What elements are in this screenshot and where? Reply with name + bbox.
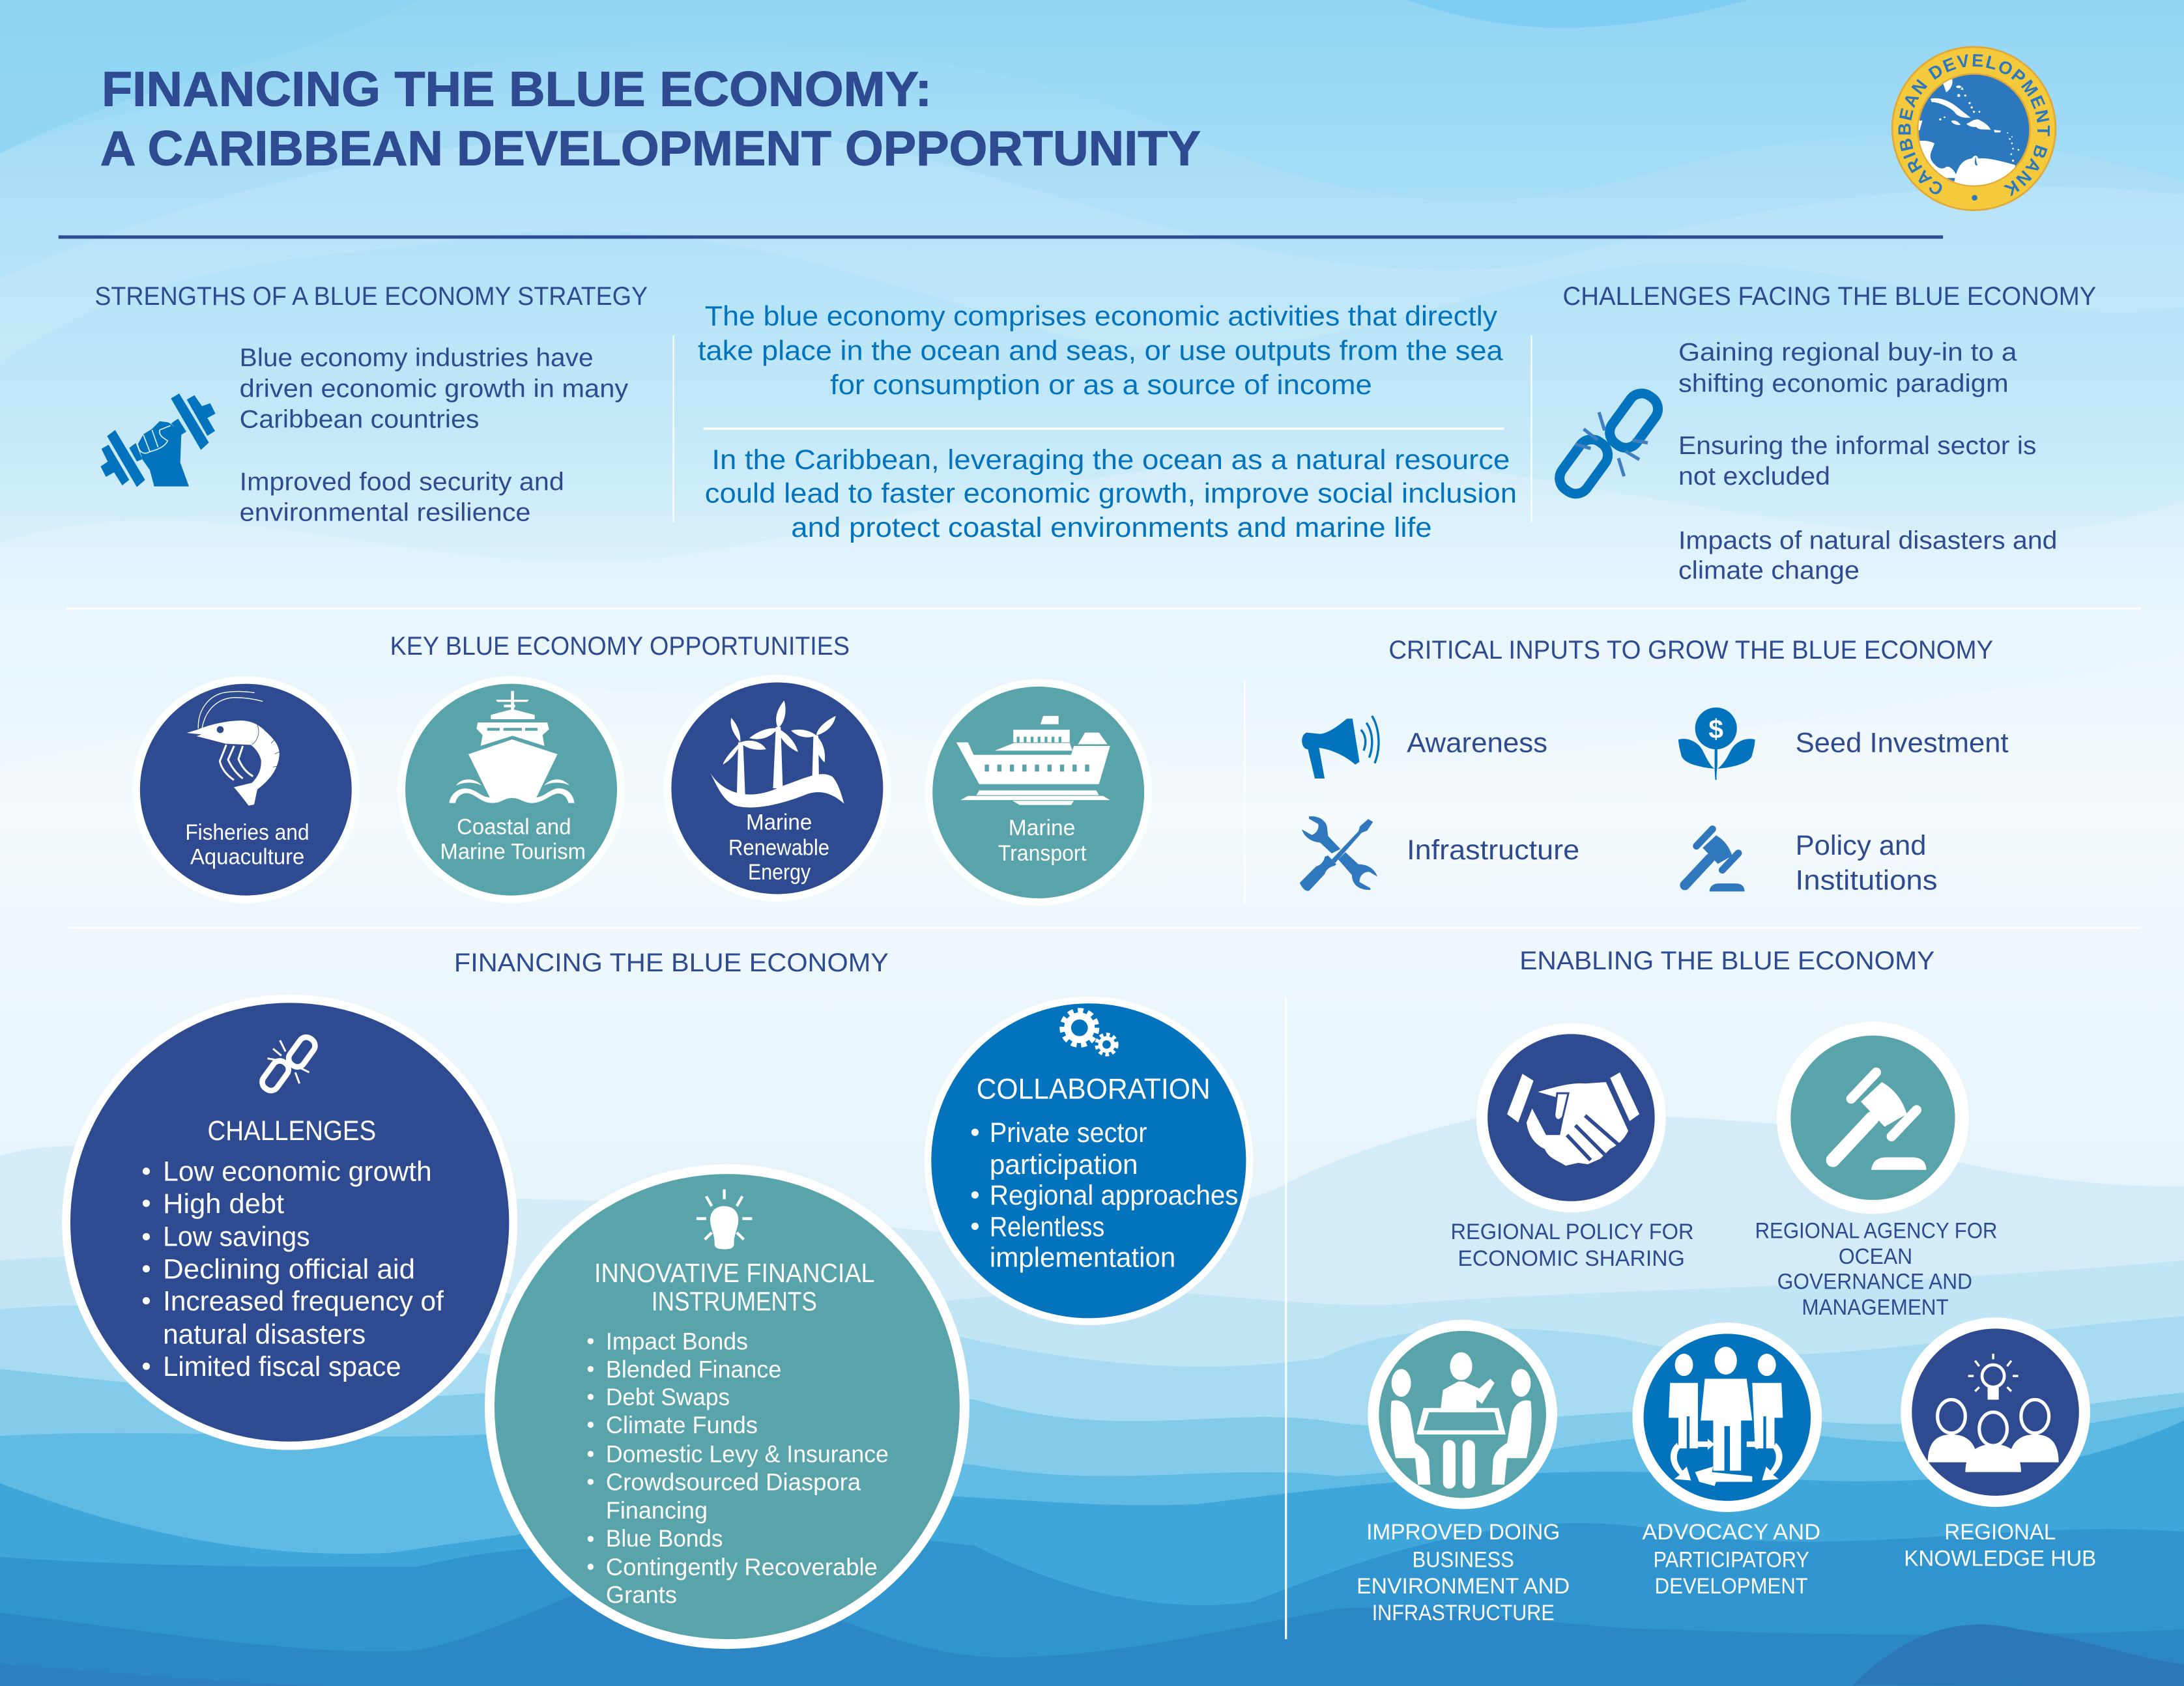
heading: financing: FINANCING THE BLUE ECONOMY xyxy=(454,949,889,977)
logo: Caribbean Development Bank seal: CARIBBEAN DEVELOPMENT BANK xyxy=(1899,54,2050,197)
panel: challenges circle xyxy=(62,995,517,1450)
text: strengths list: Blue economy industries have xyxy=(240,344,594,372)
text: challenges list: Ensuring the informal sector is xyxy=(1678,432,2036,460)
icon: gavel small xyxy=(1685,829,1745,891)
header rule xyxy=(59,235,1943,238)
bullets: instruments list: Blended Finance xyxy=(606,1355,781,1382)
text: strengths list xyxy=(240,344,629,527)
bullets: challenges list: Increased frequency of xyxy=(163,1286,444,1317)
text: challenges list: Impacts of natural disasters and xyxy=(1678,526,2057,554)
text: challenges list: climate change xyxy=(1678,557,1860,585)
bullets: collaboration list: implementation xyxy=(990,1242,1175,1274)
label: fisheries: Fisheries and xyxy=(185,820,309,845)
icon: wind turbines xyxy=(710,700,844,807)
heading: critical inputs: CRITICAL INPUTS TO GROW THE BLUE ECONOMY xyxy=(1388,636,1993,664)
label: regional agency: MANAGEMENT xyxy=(1802,1295,1949,1320)
circle: improved doing business xyxy=(1357,1320,1570,1625)
bullets: instruments list xyxy=(588,1328,889,1608)
bullets: challenges list: Declining official aid xyxy=(163,1253,415,1285)
icon: light bulb xyxy=(697,1190,752,1250)
label: renewable: Renewable xyxy=(728,836,829,861)
heading: challenges: CHALLENGES xyxy=(208,1115,376,1147)
label: improved doing business: BUSINESS xyxy=(1413,1548,1514,1573)
icon: meeting at table xyxy=(1390,1352,1532,1489)
label: improved doing business: IMPROVED DOING xyxy=(1366,1520,1560,1545)
title: FINANCING THE BLUE ECONOMY: xyxy=(102,61,932,116)
label: renewable: Marine xyxy=(746,810,812,835)
bullets: instruments list: Domestic Levy & Insurance xyxy=(606,1440,889,1468)
text: strengths list: Improved food security and xyxy=(240,468,564,496)
icon: broken chain xyxy=(1554,388,1663,499)
panel: challenges facing the blue economy xyxy=(1554,282,2096,585)
panel: blue economy definition: In the Caribbean, leveraging the ocean as a natural resource xyxy=(711,444,1510,476)
heading: key opportunities: KEY BLUE ECONOMY OPPORTUNITIES xyxy=(390,632,850,661)
bullets: instruments list: Impact Bonds xyxy=(606,1328,748,1355)
label: renewable xyxy=(728,810,829,885)
heading: enabling: ENABLING THE BLUE ECONOMY xyxy=(1519,947,1934,975)
label: policy and institutions xyxy=(1796,830,1938,896)
panel: strengths of a blue economy strategy xyxy=(94,282,648,527)
label: regional agency xyxy=(1755,1218,1998,1320)
icon: seed investment xyxy=(1678,707,1755,780)
bullets: instruments list: Contingently Recoverable xyxy=(606,1553,878,1580)
bullets: challenges list xyxy=(143,1156,444,1382)
circle: marine renewable energy xyxy=(664,675,891,902)
icon: handshake xyxy=(1507,1072,1639,1165)
bullets: instruments list: Crowdsourced Diaspora xyxy=(606,1468,861,1495)
label: regional agency: OCEAN xyxy=(1839,1244,1912,1269)
heading: innovative: INNOVATIVE FINANCIAL xyxy=(594,1258,875,1288)
panel: blue economy definition xyxy=(698,300,1517,543)
heading: innovative: INSTRUMENTS xyxy=(652,1287,817,1317)
panel: innovative financial instruments circle xyxy=(485,1164,970,1649)
label: fisheries: Aquaculture xyxy=(190,845,304,870)
circle: regional agency gavel xyxy=(1755,1022,1998,1320)
bullets: collaboration list: Relentless xyxy=(990,1211,1104,1242)
bullets: instruments list: Grants xyxy=(606,1581,677,1608)
bullets: challenges list: Limited fiscal space xyxy=(163,1351,401,1382)
text: challenges list: shifting economic paradigm xyxy=(1678,370,2009,398)
bullets: challenges list: Low savings xyxy=(163,1222,310,1253)
bullets: challenges list: natural disasters xyxy=(163,1319,366,1350)
bullets: instruments list: Financing xyxy=(606,1496,708,1524)
label: awareness: Awareness xyxy=(1407,727,1547,758)
bullets: collaboration list: Private sector xyxy=(990,1117,1147,1149)
label: transport xyxy=(998,816,1087,866)
bullets: instruments list: Debt Swaps xyxy=(606,1383,730,1410)
icon: three standing people with arrows xyxy=(1669,1347,1783,1486)
icon: cruise ship xyxy=(449,691,575,803)
label: advocacy xyxy=(1642,1520,1820,1599)
circle: marine transport xyxy=(925,679,1152,906)
label: transport: Marine xyxy=(1009,816,1075,840)
label: tourism: Coastal and xyxy=(457,815,571,840)
label: regional policy: ECONOMIC SHARING xyxy=(1458,1246,1685,1271)
title xyxy=(100,61,1201,175)
label: infrastructure: Infrastructure xyxy=(1407,835,1579,866)
bullets: instruments list: Blue Bonds xyxy=(606,1524,723,1552)
label: improved doing business: INFRASTRUCTURE xyxy=(1372,1601,1555,1625)
panel: blue economy definition: and protect coastal environments and marine life xyxy=(791,512,1432,543)
bullets: collaboration list xyxy=(971,1117,1238,1274)
label: regional agency: GOVERNANCE AND xyxy=(1777,1270,1972,1294)
label: transport: Transport xyxy=(998,841,1087,866)
text: challenges list: Gaining regional buy-in to a xyxy=(1678,339,2017,367)
icon: megaphone xyxy=(1302,716,1379,779)
circle: coastal and marine tourism xyxy=(397,676,625,903)
panel: blue economy definition: could lead to faster economic growth, improve social inclusion xyxy=(705,478,1517,509)
label: knowledge hub xyxy=(1904,1520,2096,1571)
title: A CARIBBEAN DEVELOPMENT OPPORTUNITY xyxy=(100,121,1201,175)
label: tourism: Marine Tourism xyxy=(440,839,586,864)
dividers xyxy=(67,336,2141,1639)
circle: fisheries and aquaculture xyxy=(132,676,360,903)
panel: collaboration circle xyxy=(925,997,1253,1325)
panel: blue economy definition: take place in the ocean and seas, or use outputs from the sea xyxy=(698,336,1503,367)
label: renewable: Energy xyxy=(748,860,811,885)
text: challenges list: not excluded xyxy=(1678,463,1830,491)
icon: broken chain white xyxy=(259,1034,318,1094)
label: regional policy xyxy=(1450,1220,1694,1271)
label: advocacy: ADVOCACY AND xyxy=(1642,1520,1820,1545)
icon: seed investment: $ xyxy=(1708,714,1723,744)
label: improved doing business: ENVIRONMENT AND xyxy=(1357,1574,1570,1599)
panel: critical inputs xyxy=(1300,636,2009,896)
bullets: instruments list: Climate Funds xyxy=(606,1411,758,1438)
text: strengths list: environmental resilience xyxy=(240,499,530,527)
text: challenges list xyxy=(1678,339,2057,585)
bullets: challenges list: High debt xyxy=(163,1188,284,1220)
text: strengths list: driven economic growth in many xyxy=(240,375,629,403)
bullets: challenges list: Low economic growth xyxy=(163,1156,432,1187)
panel: blue economy definition: for consumption or as a source of income xyxy=(830,369,1372,401)
icon: ferry xyxy=(956,716,1110,805)
label: fisheries xyxy=(185,820,309,870)
bullets: collaboration list: participation xyxy=(990,1149,1138,1180)
label: advocacy: PARTICIPATORY xyxy=(1654,1548,1809,1573)
icon: gavel xyxy=(1833,1072,1927,1170)
circle: advocacy xyxy=(1632,1322,1822,1599)
label: advocacy: DEVELOPMENT xyxy=(1655,1574,1808,1599)
label: policy and institutions: Institutions xyxy=(1796,864,1938,896)
bullets: collaboration list: Regional approaches xyxy=(990,1180,1238,1211)
label: knowledge hub: REGIONAL xyxy=(1944,1520,2056,1545)
heading: challenges facing: CHALLENGES FACING THE BLUE ECONOMY xyxy=(1563,282,2096,311)
icon: wrench and screwdriver xyxy=(1300,816,1377,891)
label: policy and institutions: Policy and xyxy=(1796,830,1927,861)
label: regional policy: REGIONAL POLICY FOR xyxy=(1450,1220,1694,1244)
circle: regional policy handshake xyxy=(1450,1023,1694,1271)
icon: people with lightbulb xyxy=(1928,1354,2059,1472)
heading: strengths: STRENGTHS OF A BLUE ECONOMY STRATEGY xyxy=(94,282,648,311)
heading: collaboration: COLLABORATION xyxy=(977,1072,1211,1106)
icon: fist lifting dumbbell xyxy=(100,393,216,487)
text: strengths list: Caribbean countries xyxy=(240,405,479,433)
icon: shrimp xyxy=(187,692,280,806)
heading: innovative xyxy=(594,1258,875,1317)
label: regional agency: REGIONAL AGENCY FOR xyxy=(1755,1218,1998,1243)
label: knowledge hub: KNOWLEDGE HUB xyxy=(1904,1546,2096,1571)
label: improved doing business xyxy=(1357,1520,1570,1625)
label: tourism xyxy=(440,815,586,864)
circle: knowledge hub xyxy=(1901,1317,2096,1571)
icon: gears xyxy=(1062,1010,1117,1055)
panel: blue economy definition: The blue economy comprises economic activities that directly xyxy=(705,300,1498,332)
label: seed investment: Seed Investment xyxy=(1796,727,2009,758)
